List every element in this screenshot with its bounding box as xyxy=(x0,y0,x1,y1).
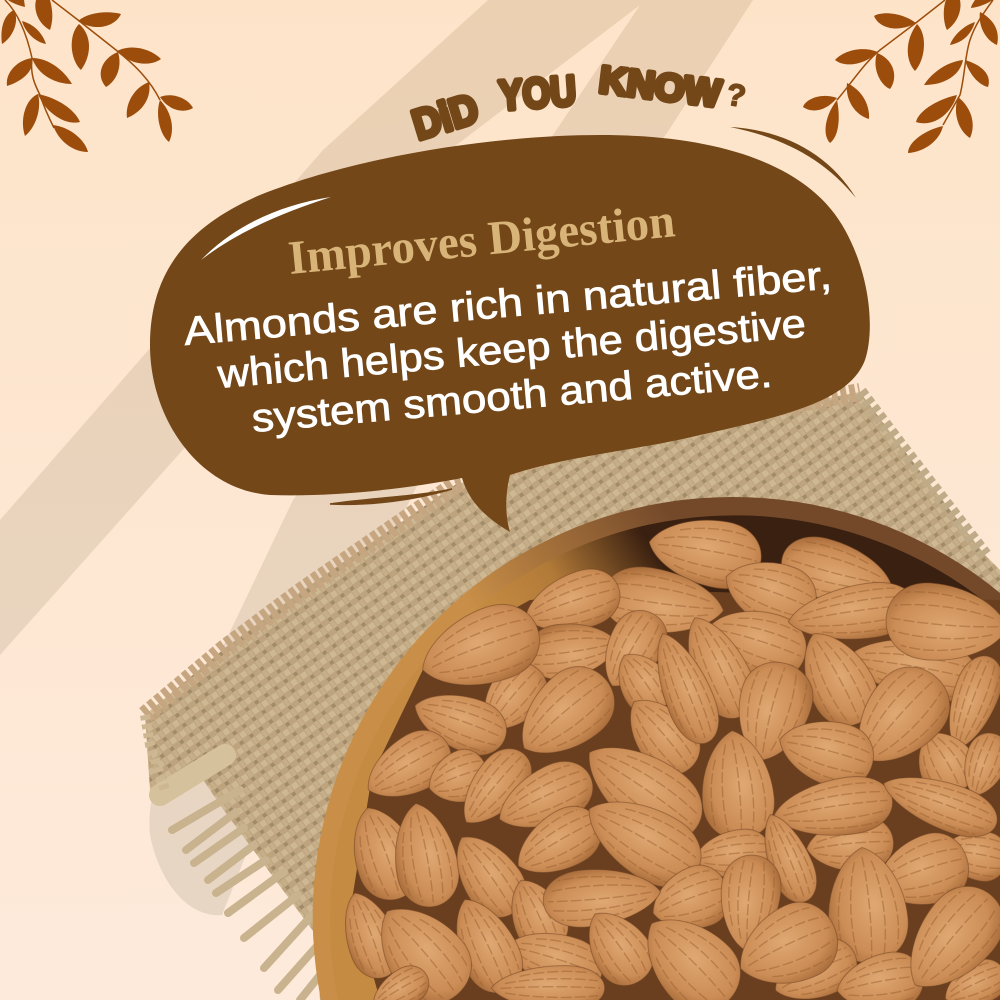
leaf branch top left xyxy=(1,0,193,152)
heading: did you know: KNOW xyxy=(597,59,723,116)
accent stroke top right xyxy=(730,127,856,198)
leaf branch top right xyxy=(803,0,998,153)
title: Improves Digestion xyxy=(286,194,677,285)
heading: did you know: DiD xyxy=(407,84,484,149)
accent stroke bottom xyxy=(330,489,452,504)
body text: Almonds are rich in natural fiber, xyxy=(182,253,833,354)
heading: did you know: YOU xyxy=(497,67,577,119)
speech bubble xyxy=(150,135,870,532)
diagonal background stripes xyxy=(0,0,753,915)
white highlight stroke xyxy=(201,197,331,260)
heading: did you know xyxy=(407,59,749,149)
burlap cloth xyxy=(145,392,1000,1000)
body text: which helps keep the digestive xyxy=(215,302,808,397)
almonds in bowl xyxy=(331,509,1000,1000)
body text: system smooth and active. xyxy=(250,352,774,441)
wooden bowl xyxy=(313,497,1000,1000)
heading: did you know: ? xyxy=(724,76,749,114)
body text xyxy=(182,253,833,441)
